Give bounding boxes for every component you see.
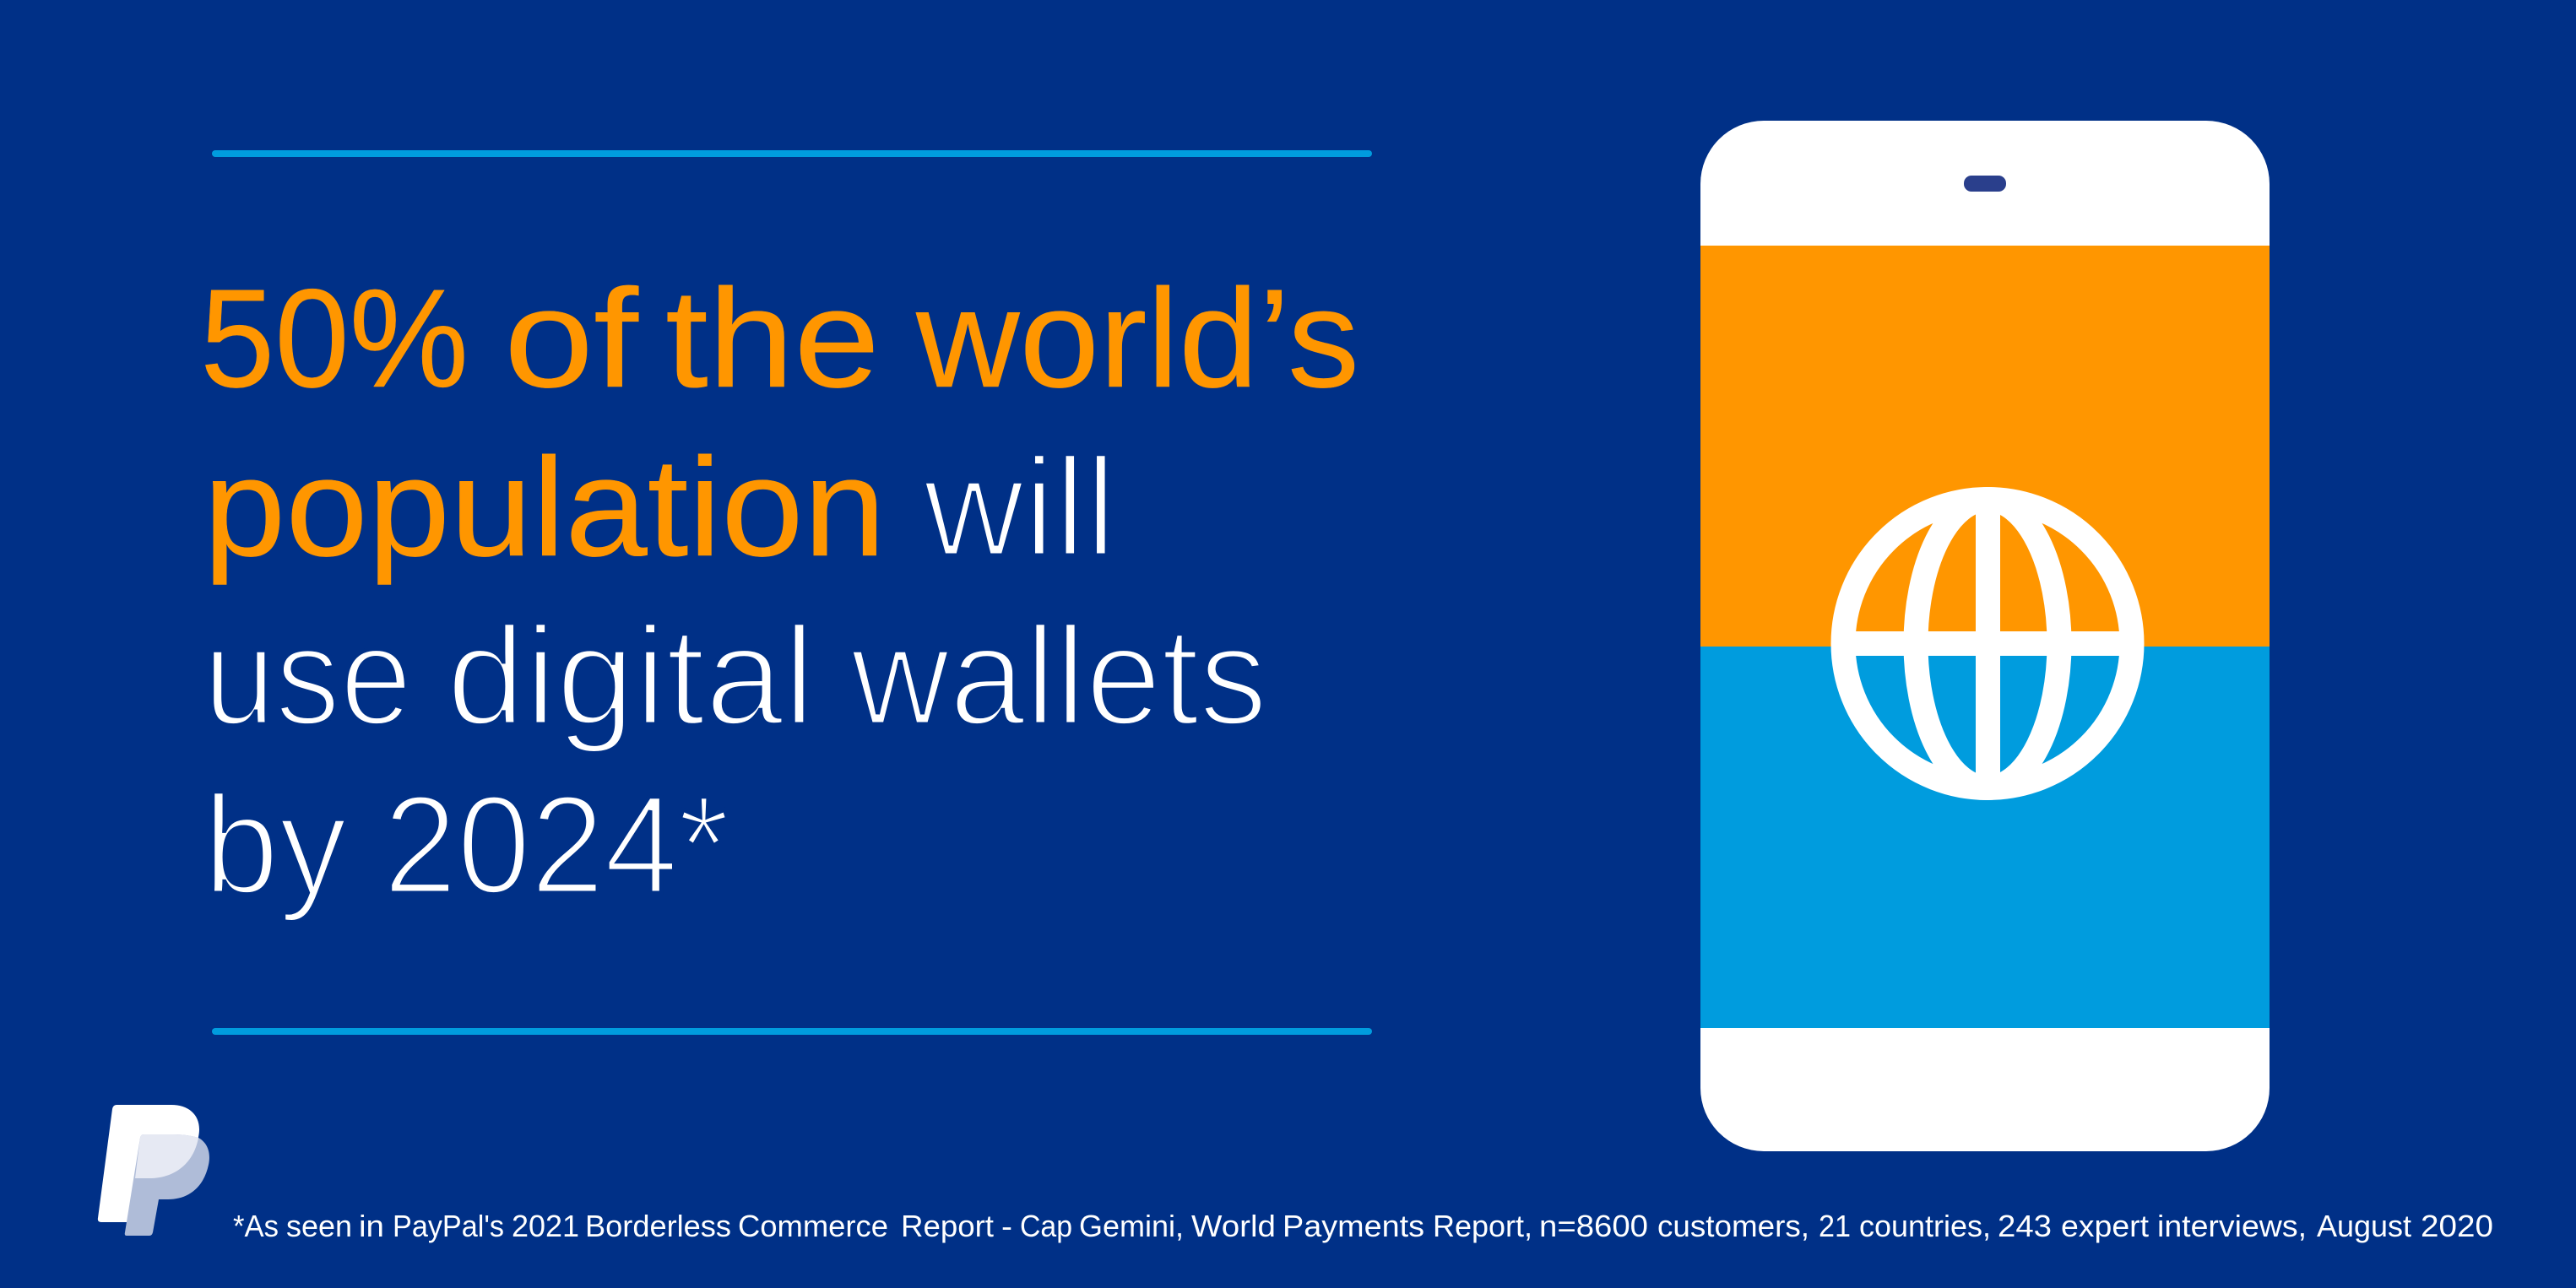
icon: PayPal logo (98, 1105, 209, 1236)
headline line 2 orange: population (203, 430, 886, 586)
headline line 4: by (203, 767, 347, 923)
footnote: *As (233, 1209, 279, 1243)
headline line 2 white: will (923, 430, 1116, 586)
footnote: World (1191, 1209, 1276, 1243)
headline line 3: use (203, 598, 412, 755)
footnote: August (2317, 1209, 2411, 1243)
footnote: Borderless (585, 1209, 731, 1243)
footnote: seen (286, 1209, 352, 1243)
footnote: - (1001, 1209, 1012, 1243)
footnote: 21 (1819, 1209, 1851, 1243)
headline line 1 (200, 261, 1359, 417)
footnote (233, 1209, 2493, 1243)
headline line 1: of (504, 261, 639, 417)
footnote: Gemini, (1079, 1209, 1184, 1243)
footnote: Commerce (738, 1209, 888, 1243)
headline line 1: 50% (200, 261, 469, 417)
headline line 1: the (665, 261, 880, 417)
footnote: expert (2061, 1209, 2149, 1243)
headline line 4: 2024* (383, 767, 729, 923)
headline line 3: digital (447, 598, 815, 755)
orange screen band (1700, 246, 2270, 647)
headline (200, 261, 1359, 923)
footnote: Payments (1283, 1209, 1424, 1243)
footnote: 2020 (2421, 1209, 2493, 1243)
footnote: 243 (1998, 1209, 2052, 1243)
phone illustration (1700, 121, 2270, 1151)
icon: globe (1843, 499, 2132, 788)
footnote: n=8600 (1539, 1209, 1648, 1243)
headline line 3: wallets (850, 598, 1267, 755)
footnote: interviews, (2157, 1209, 2307, 1243)
footnote: customers, (1657, 1209, 1809, 1243)
headline line 3 (203, 598, 1267, 755)
footnote: Report, (1433, 1209, 1532, 1243)
footnote: Report (901, 1209, 994, 1243)
headline line 4 (203, 767, 729, 923)
blue screen band (1700, 647, 2270, 1028)
footnote: 2021 (512, 1209, 579, 1243)
phone body (1700, 121, 2270, 1151)
footnote: Cap (1020, 1209, 1072, 1243)
footnote: PayPal's (393, 1209, 504, 1243)
footnote: in (359, 1209, 384, 1243)
speaker (1964, 176, 2006, 192)
footnote: countries, (1859, 1209, 1991, 1243)
headline line 1: world’s (915, 261, 1359, 417)
